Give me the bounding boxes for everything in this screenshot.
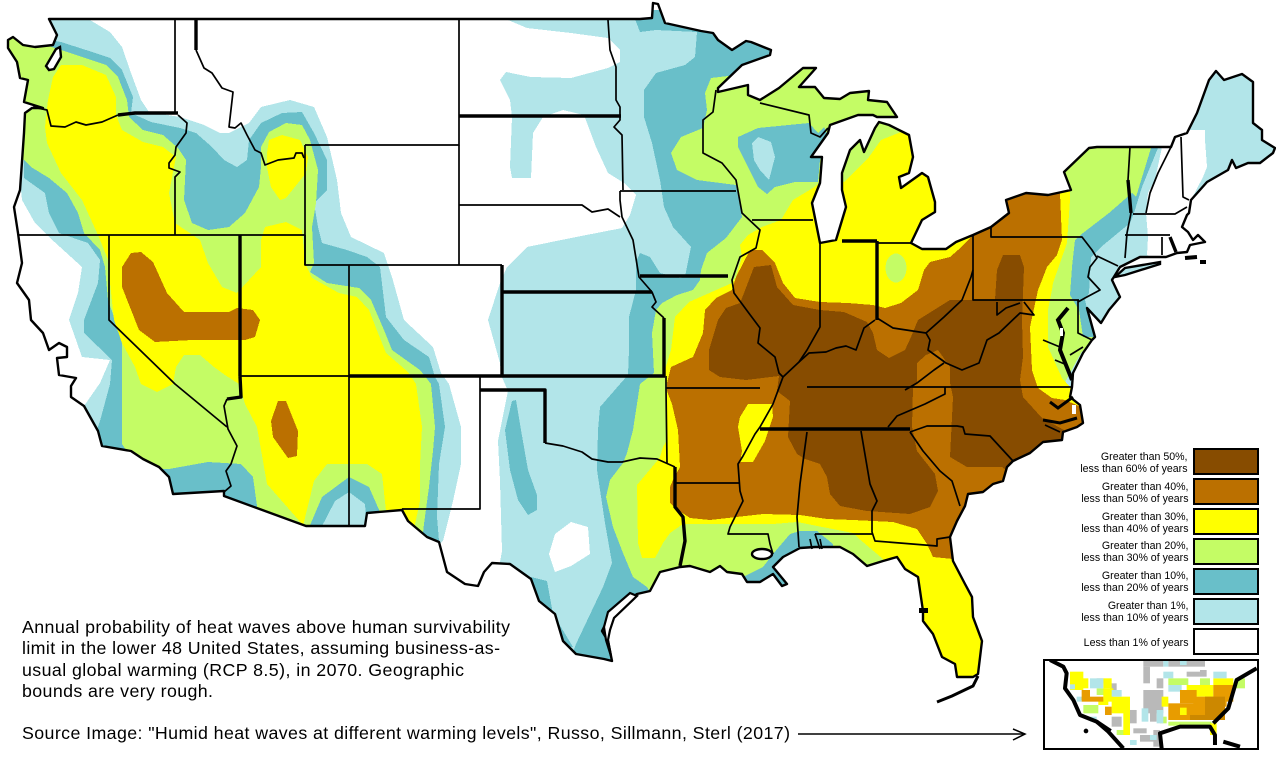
zone: 10-20 percent, Northeast band (1070, 148, 1158, 337)
zone: 20-30 percent, Ohio oval (886, 254, 906, 282)
caption text: usual global warming (RCP 8.5), in 2070. Geographic (22, 660, 464, 680)
zone: 20-30 percent, Midwest to Gulf and Northeast (606, 69, 1151, 590)
Tampa Bay (919, 608, 928, 613)
legend item: 1-10 percent: less than 10% of years (1081, 612, 1188, 624)
coastal details (46, 47, 1206, 702)
legend item: 30-40 percent: less than 40% of years (1081, 523, 1188, 535)
zone: 30-40 percent, east (637, 130, 1090, 700)
zone: 10-20 percent, Wisconsin blob (738, 123, 830, 194)
zone: 30-40 percent, Montana and Wyoming patch (267, 135, 308, 200)
Mobile Bay (810, 539, 812, 549)
source citation: Source Image: "Humid heat waves at different warming levels", Russo, Sillmann, Sterl (2017) (22, 723, 790, 743)
legend item: 1-10 percent: Greater than 1%, (1108, 600, 1188, 612)
zone: 10-20 percent, west (23, 41, 445, 541)
legend item: 50-60 percent: less than 60% of years (1080, 463, 1188, 475)
legend (1080, 449, 1258, 654)
Puget Sound (46, 47, 61, 70)
zone: greater than 1 percent, central and east (488, 10, 1276, 700)
zone: white New England gap (1146, 130, 1207, 256)
zone: 40-50 percent, east (667, 194, 1082, 559)
zone: 40-50 percent, New Mexico oval (271, 401, 298, 458)
Texas barrier islands (604, 593, 637, 656)
caption text: bounds are very rough. (22, 681, 213, 701)
legend item: under 1 percent (1084, 629, 1258, 654)
legend item: 30-40 percent: Greater than 30%, (1102, 511, 1188, 523)
Cape Cod islands (1185, 257, 1197, 258)
legend item: 40-50 percent: less than 50% of years (1081, 493, 1188, 505)
legend item: 40-50 percent (1081, 479, 1258, 505)
legend item: 20-30 percent (1081, 539, 1258, 564)
zone: southwest arch light (322, 492, 366, 525)
zone: 40-50 percent, Kentucky patch (873, 323, 911, 358)
zone: greater than 1 percent, west (21, 20, 461, 543)
zone: 1-10 percent, Wisconsin centre (752, 137, 775, 180)
zone: white south Texas oval (549, 522, 590, 572)
arrow to source image (798, 729, 1025, 740)
Pamlico Sound (1050, 397, 1073, 408)
Long Island (1115, 262, 1160, 277)
legend item: 20-30 percent: less than 30% of years (1081, 552, 1188, 564)
zone: 50-60 percent (709, 255, 1064, 514)
Florida Keys (937, 676, 978, 702)
caption text: Annual probability of heat waves above human survivability (22, 617, 510, 637)
zone: 20-30 percent, west (0, 30, 435, 560)
Nantucket (1200, 260, 1206, 264)
Lake Pontchartrain (752, 549, 772, 559)
zone: 40-50 percent, Nevada (122, 252, 260, 342)
legend item: 10-20 percent: Greater than 10%, (1102, 570, 1188, 582)
legend item: 20-30 percent: Greater than 20%, (1102, 540, 1188, 552)
zone: 10-20 percent, east Texas coast strip (531, 577, 573, 647)
legend item: 1-10 percent (1081, 599, 1258, 624)
state borders (18, 19, 1189, 566)
Chesapeake Bay (1058, 308, 1072, 380)
legend item: 50-60 percent (1080, 449, 1258, 475)
legend item: 50-60 percent: Greater than 50%, (1101, 451, 1188, 463)
zone: 10-20 percent, Louisiana coast (744, 531, 833, 584)
caption text (22, 617, 510, 701)
legend item: 10-20 percent (1081, 569, 1258, 594)
legend item: 30-40 percent (1081, 509, 1258, 535)
zone: 10-20 percent, west Texas stripe (505, 400, 537, 515)
legend item: under 1 percent: Less than 1% of years (1084, 637, 1188, 649)
zone: southwest arch teal (310, 478, 380, 525)
source image inset map (1044, 660, 1258, 749)
caption text: limit in the lower 48 United States, assuming business-as- (22, 638, 500, 658)
zone: 30-40 percent, Mississippi river wedge (738, 404, 773, 462)
zone: 10-20 percent, Minnesota to Texas (574, 10, 770, 660)
legend item: 40-50 percent: Greater than 40%, (1102, 481, 1188, 493)
zone: 30-40 percent, west (45, 65, 422, 560)
zone: southwest arch green (302, 464, 386, 530)
legend item: 10-20 percent: less than 20% of years (1081, 582, 1188, 594)
